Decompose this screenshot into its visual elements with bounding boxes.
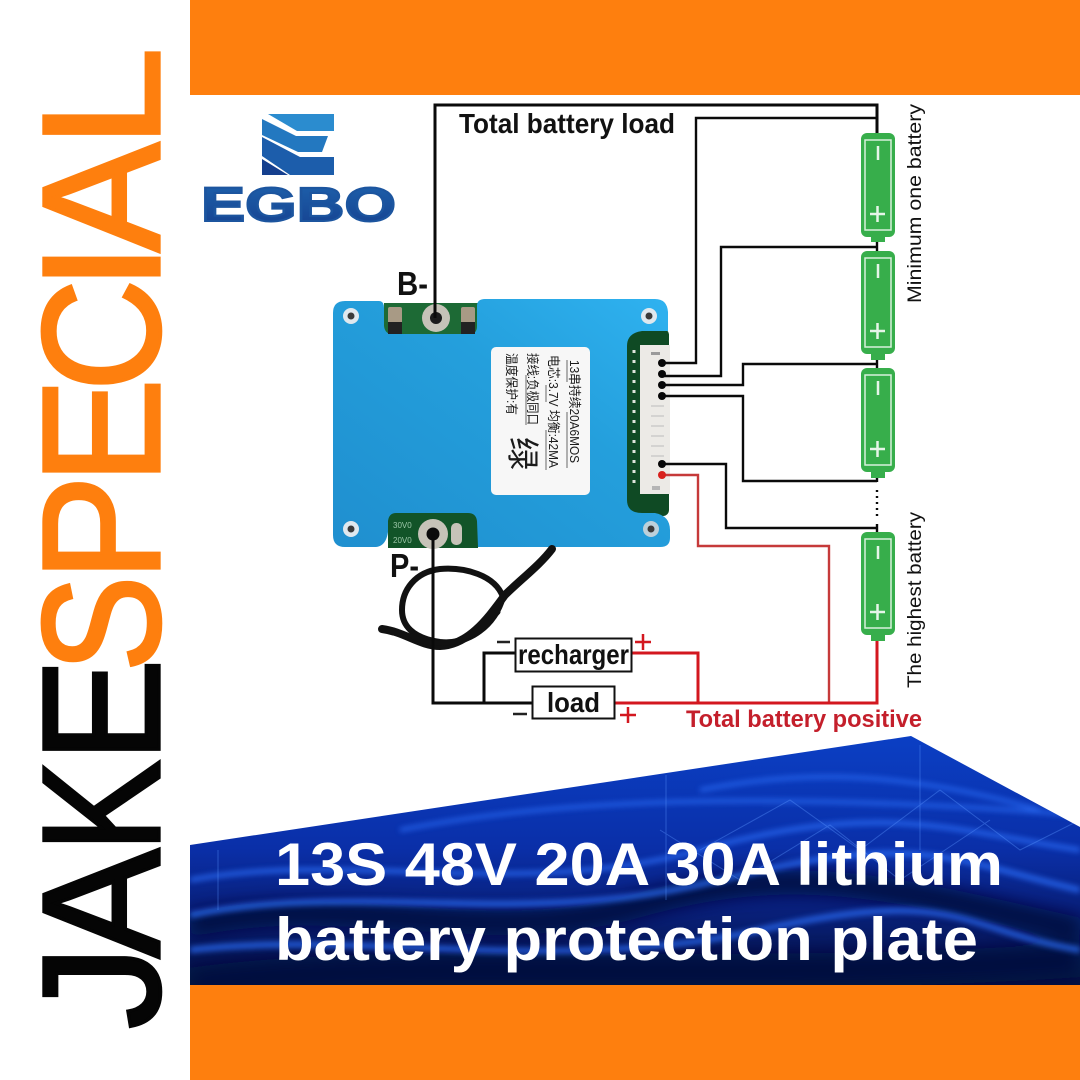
- sticker text: 接线:负极同口: [525, 353, 540, 425]
- brand word: SPECIAL: [8, 47, 195, 672]
- battery 1: [861, 133, 895, 242]
- sticker text: 电芯:3.7V 均衡:42MA: [546, 355, 561, 468]
- label: total battery positive: Total battery positive: [686, 706, 922, 733]
- sticker text: 绿: [504, 437, 541, 470]
- brand word: SPECIAL: E: [8, 378, 195, 484]
- logo wordmark: EGBO: [201, 179, 396, 232]
- label: the highest battery: The highest battery: [905, 511, 926, 688]
- sticker text: 13串持续20A6MOS: [567, 360, 582, 463]
- brand word: JAKE: [8, 659, 195, 1029]
- banner: blue network background: [190, 736, 1080, 985]
- blue board cover: [333, 299, 670, 547]
- red positive wires: [615, 636, 877, 703]
- banner title: [275, 831, 1003, 973]
- label: minimum one battery: Minimum one battery: [905, 103, 926, 303]
- batteries: [861, 133, 895, 641]
- brand word: SPECIAL: L: [8, 47, 194, 148]
- title line 1: 13S 48V 20A 30A lithium: [275, 831, 1003, 898]
- P- terminal: 30V0: [393, 521, 412, 530]
- mounting holes: [343, 308, 659, 537]
- black balance wires: [433, 105, 877, 703]
- label: P- terminal: P-: [390, 547, 419, 584]
- connector wire dots: [658, 359, 666, 479]
- battery 3: [861, 368, 895, 478]
- bottom orange bar: [190, 985, 1080, 1080]
- logo: EGBO: [201, 114, 396, 232]
- battery 2: [861, 251, 895, 360]
- brand word: SPECIAL: I: [9, 242, 195, 291]
- vertical brand wordmark: [8, 47, 195, 1029]
- P- terminal: [393, 519, 462, 549]
- label: B- terminal: B-: [397, 265, 428, 302]
- brand word: SPECIAL: P: [8, 475, 195, 581]
- brand word: JAKE: K: [9, 760, 195, 852]
- top orange bar: [190, 0, 1080, 95]
- red sense wire: [662, 475, 829, 703]
- polarity marks: [497, 634, 651, 723]
- recharger box: recharger: [518, 639, 629, 670]
- sticker text: 温度保护:有: [504, 353, 519, 415]
- brand word: SPECIAL: S: [9, 576, 195, 672]
- panel: BMS protection board: [333, 299, 670, 549]
- sticker text: [504, 353, 582, 470]
- load box: [532, 686, 614, 718]
- load box: load: [547, 687, 600, 718]
- label: total battery load: Total battery load: [459, 108, 675, 139]
- battery 4: [861, 532, 895, 641]
- brand word: JAKE: E: [9, 659, 195, 762]
- brand word: JAKE: J: [9, 945, 195, 1029]
- temperature sensor cable: [382, 549, 552, 646]
- brand word: SPECIAL: C: [9, 279, 195, 391]
- icon: EGBO emblem: [262, 114, 334, 175]
- brand word: SPECIAL: A: [8, 142, 195, 252]
- board PCB under the cover: [384, 303, 669, 548]
- B- terminal with capacitors: [388, 304, 475, 334]
- spec sticker: [491, 347, 590, 495]
- balance connector: [634, 345, 670, 494]
- title line 2: battery protection plate: [275, 906, 978, 973]
- P- terminal: 20V0: [393, 536, 412, 545]
- brand word: JAKE: A: [8, 848, 195, 958]
